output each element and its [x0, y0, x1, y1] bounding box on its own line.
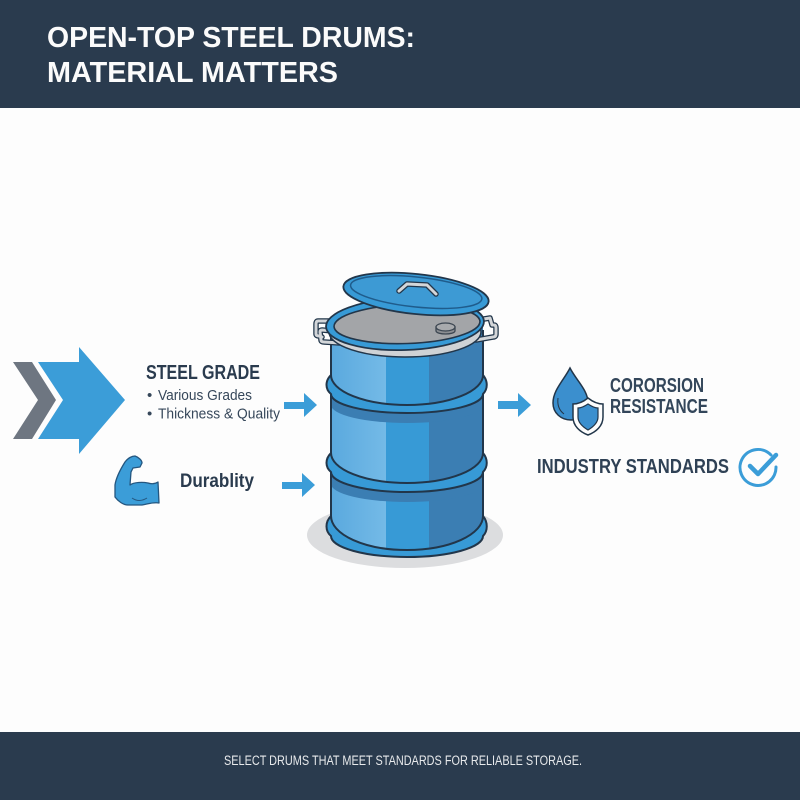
floor shadow: [307, 502, 503, 568]
text block: steel grade: •: [147, 387, 152, 404]
title: [47, 22, 415, 89]
upper rolling hoop: [326, 375, 487, 413]
silver collar: [329, 307, 481, 357]
label: corrosion resistance: CORORSION: [610, 375, 704, 397]
text block: steel grade: •: [147, 406, 152, 422]
arrow: durability to drum: [282, 473, 315, 497]
label: industry standards: INDUSTRY STANDARDS: [537, 456, 729, 478]
arrow: drum to corrosion resistance: [498, 393, 531, 417]
title: OPEN-TOP STEEL DRUMS:: [47, 22, 415, 54]
lid handle: [399, 284, 436, 294]
icon: chevron arrow: [13, 347, 125, 454]
drum body: [332, 327, 483, 549]
text block: steel grade: Thickness & Quality: [158, 406, 281, 422]
label: corrosion resistance: RESISTANCE: [610, 396, 708, 418]
footer band: [0, 732, 800, 800]
handle: right: [476, 318, 496, 340]
top rim: [325, 295, 485, 353]
lid: [341, 266, 491, 322]
handle: left: [316, 321, 340, 343]
icon: check circle: [740, 449, 776, 485]
icon: flexed arm: [115, 456, 159, 505]
footer text: SELECT DRUMS THAT MEET STANDARDS FOR RELIABLE STORAGE.: [224, 753, 582, 768]
arrow: steel grade to drum: [284, 393, 317, 417]
drum interior: [333, 302, 481, 346]
text block: steel grade: STEEL GRADE: [146, 362, 260, 384]
illustration: steel drum: [307, 266, 503, 570]
label: corrosion resistance: [610, 375, 708, 418]
title: MATERIAL MATTERS: [47, 57, 338, 89]
lower rolling hoop: [326, 453, 487, 492]
label: durability: Durablity: [180, 471, 254, 492]
header band: [0, 0, 800, 108]
bottom rim: [326, 516, 487, 557]
icon: water drop with shield: [553, 368, 603, 435]
text block: steel grade: [146, 362, 281, 422]
text block: steel grade: Various Grades: [158, 388, 252, 404]
bung cap: [436, 323, 455, 334]
